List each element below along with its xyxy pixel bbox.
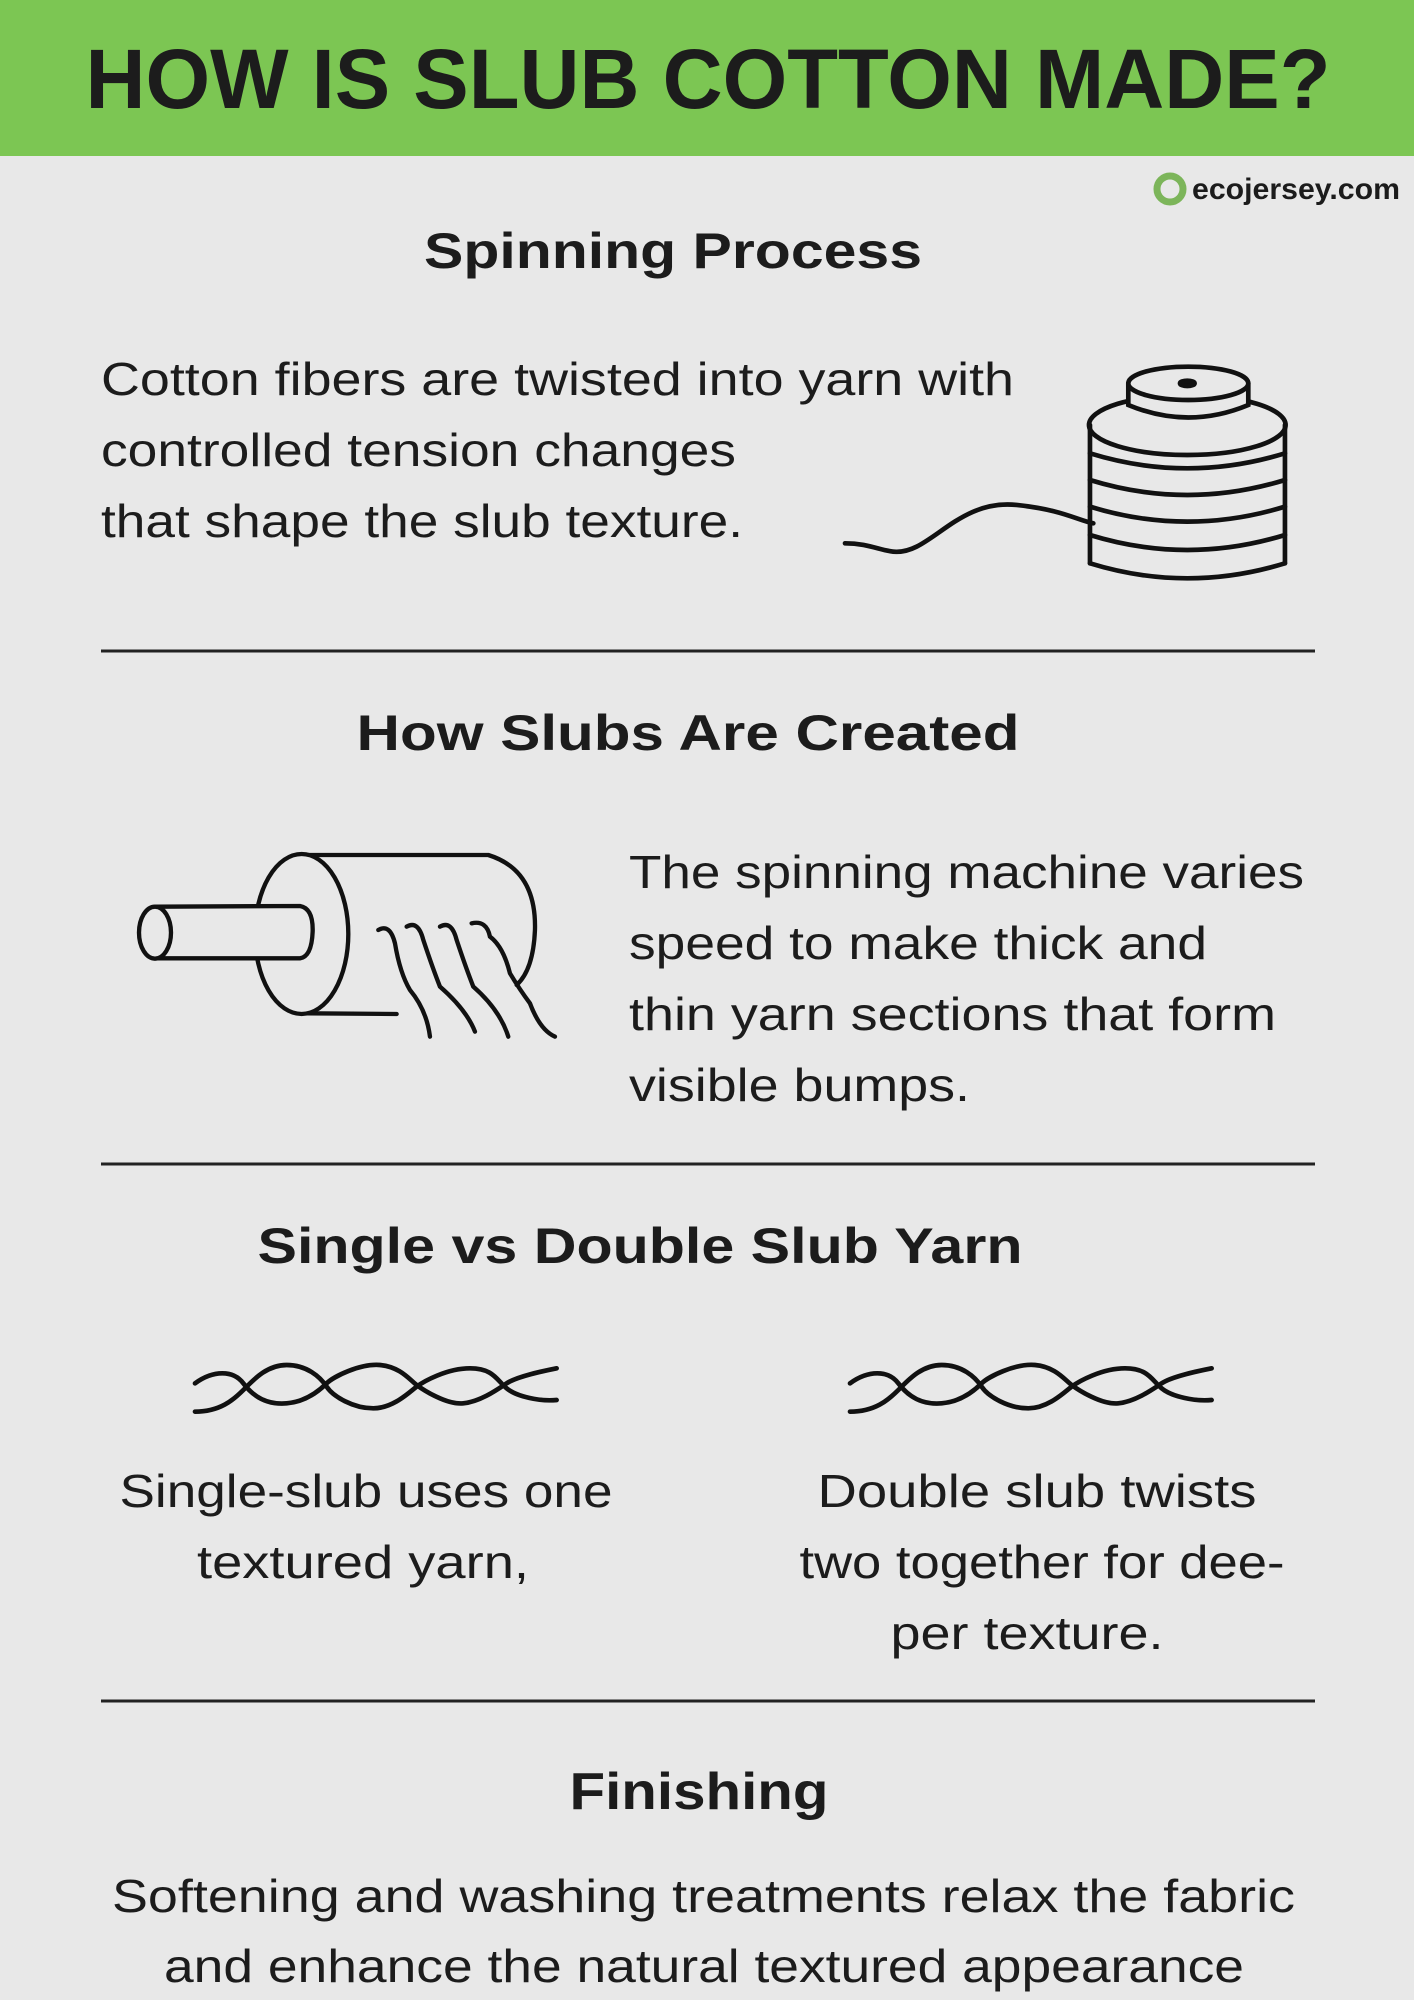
text: spinning description: that shape the slub texture. [101,495,743,547]
icon: double slub yarn [850,1365,1212,1412]
heading: Finishing: Finishing [570,1763,828,1821]
icon: spool of thread [845,367,1286,578]
text: finishing description: and enhance the natural textured appearance [164,1940,1244,1992]
heading: Spinning Process: Spinning Process [424,223,922,279]
text: spinning description [101,353,1014,547]
icon: single slub yarn [195,1365,557,1412]
heading: Single vs Double Slub Yarn: Single vs Double Slub Yarn [258,1218,1022,1274]
text: finishing description: Softening and washing treatments relax the fabric [112,1870,1295,1922]
header banner [0,0,1414,156]
text: finishing description [112,1870,1295,1992]
text: slub creation description: The spinning machine varies [629,846,1304,898]
text: double slub description: Double slub twists [818,1465,1256,1517]
heading: How Slubs Are Created: How Slubs Are Created [356,705,1020,761]
text: single slub description: Single-slub uses one [120,1465,612,1517]
text: single slub description: textured yarn, [197,1536,529,1588]
text: double slub description: per texture. [890,1607,1164,1659]
text: slub creation description [629,846,1304,1111]
logo: ecojersey.com: ecojersey.com [1192,173,1400,206]
text: double slub description [800,1465,1284,1659]
text: slub creation description: speed to make thick and [629,917,1207,969]
text: double slub description: two together for dee- [800,1536,1284,1588]
icon: spinning roller with fibers [139,854,555,1037]
text: spinning description: controlled tension changes [101,424,736,476]
text: slub creation description: visible bumps. [629,1059,970,1111]
text: spinning description: Cotton fibers are twisted into yarn with [101,353,1014,405]
title: HOW IS SLUB COTTON MADE? [86,32,1330,126]
text: single slub description [120,1465,612,1588]
text: slub creation description: thin yarn sections that form [629,988,1276,1040]
